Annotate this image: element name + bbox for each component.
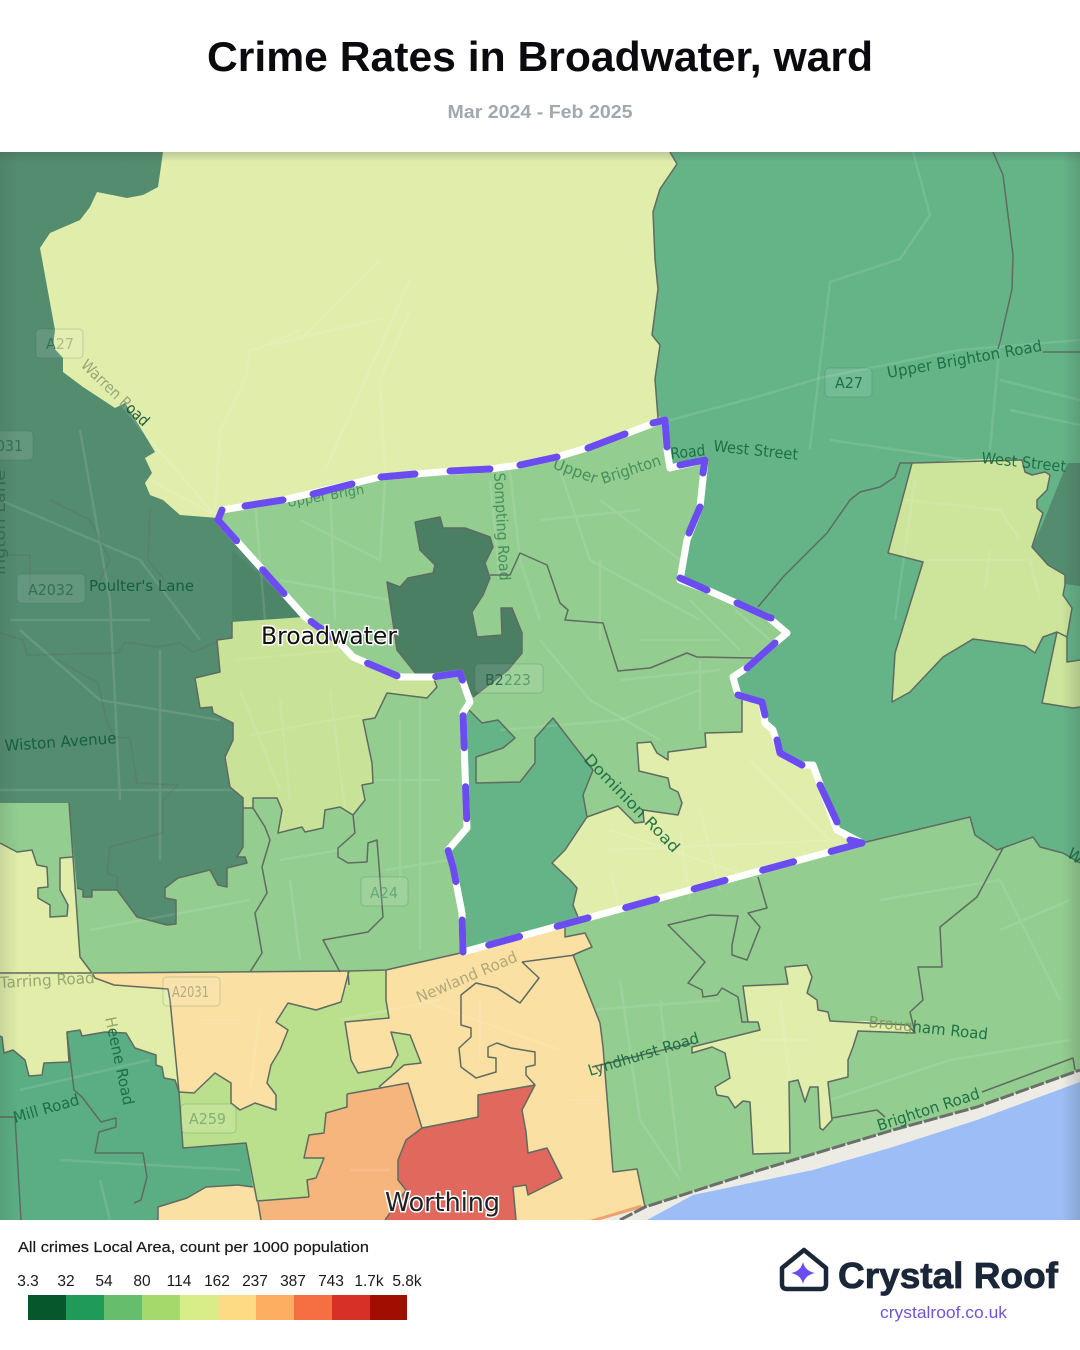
area: orange — [258, 1083, 422, 1220]
legend tick labels: 114 — [167, 1273, 192, 1290]
area: pale north-east town — [692, 965, 915, 1154]
ward and area borders — [0, 152, 1080, 1220]
road labels: Wiston Avenue — [4, 729, 117, 755]
area: light green centre — [179, 970, 421, 1201]
road labels: B2223 — [485, 671, 531, 689]
road labels: A2032 — [28, 581, 74, 599]
road labels: Brighton — [599, 452, 663, 488]
area: dark green enclave — [387, 517, 522, 697]
road labels: Warren Road — [77, 356, 153, 430]
sea and beach — [590, 1070, 1080, 1220]
place label: Broadwater: Broadwater — [261, 622, 397, 650]
dashes: bottom edge — [463, 843, 862, 952]
road labels: West Street — [981, 449, 1067, 476]
map base: light green areas — [0, 416, 1080, 1220]
dashes: north and east edges — [218, 420, 862, 843]
logo: Crystal Roof — [782, 1250, 1059, 1322]
dashes: west edge — [218, 520, 470, 952]
legend tick labels: 80 — [133, 1273, 151, 1290]
road labels: Heene Road — [101, 1015, 137, 1107]
road labels: A24 — [370, 884, 398, 902]
choropleth map — [0, 152, 1080, 1220]
legend tick labels: 32 — [57, 1273, 75, 1290]
road labels: West Street — [713, 437, 799, 464]
area: pale east island — [888, 459, 1072, 702]
legend title: All crimes Local Area, count per 1000 population — [18, 1239, 369, 1256]
road labels: Lyndhurst Road — [586, 1029, 701, 1080]
legend tick labels — [17, 1273, 422, 1290]
road labels: A2031 — [172, 983, 209, 1001]
legend tick labels: 162 — [204, 1273, 230, 1290]
area: red hotspot — [385, 1085, 562, 1220]
road labels: A27 — [835, 374, 863, 392]
area: dark green west — [0, 152, 305, 925]
area: mid green south-west — [0, 1030, 253, 1220]
legend tick labels: 387 — [280, 1273, 306, 1290]
road labels: Newland Road — [414, 948, 520, 1007]
ward boundary: white and purple dashed — [218, 420, 862, 952]
area: peach town centre — [158, 925, 645, 1220]
road labels: Upper — [551, 455, 601, 488]
road labels: Mill Road — [11, 1091, 81, 1127]
area: dark triangle beside ward — [232, 555, 300, 622]
road labels: A259 — [189, 1110, 226, 1128]
legend tick labels: 3.3 — [17, 1273, 39, 1290]
wordmark: Crystal Roof — [838, 1255, 1059, 1296]
area: pale yellow north — [40, 152, 677, 518]
legend tick labels: 1.7k — [354, 1273, 384, 1290]
area: pale south-east ward — [552, 700, 862, 917]
edge vignette — [0, 152, 1080, 1220]
road labels: Road — [670, 441, 706, 463]
area: pale centre-west — [195, 617, 437, 833]
road labels: Upper Brighton Road — [886, 337, 1043, 382]
legend tick labels: 54 — [95, 1273, 113, 1290]
road network — [0, 152, 1080, 1220]
road labels: A27 — [46, 335, 74, 353]
road shields — [0, 329, 872, 1133]
road labels: Tarring Road — [0, 969, 95, 992]
road labels: Poulter's Lane — [89, 577, 194, 595]
area: pale south-west — [0, 843, 179, 1092]
place label: Worthing: Worthing — [385, 1188, 500, 1218]
icon: house with star — [782, 1250, 826, 1289]
road labels — [0, 335, 1080, 1135]
road labels: Dominion Road — [580, 750, 683, 856]
legend tick labels: 743 — [318, 1273, 344, 1290]
area: dark corner east — [1032, 463, 1080, 586]
road labels: Upper Brigh — [286, 483, 365, 511]
subtitle: date range: Mar 2024 - Feb 2025 — [448, 101, 632, 122]
road labels: Brougham Road — [868, 1013, 989, 1044]
legend — [17, 1239, 422, 1320]
legend tick labels: 237 — [242, 1273, 268, 1290]
title: Crime Rates in Broadwater, ward — [207, 33, 873, 80]
area: mid green east — [652, 152, 1080, 863]
area: peach west of A2031 — [92, 971, 349, 1110]
area: pale sliver east — [1042, 632, 1080, 708]
legend tick labels: 5.8k — [392, 1273, 422, 1290]
legend colour bar — [28, 1295, 407, 1320]
road labels: Brighton Road — [875, 1085, 982, 1135]
website link text: crystalroof.co.uk — [880, 1304, 1008, 1322]
road labels: Sompting Road — [490, 472, 514, 581]
area: mid green south ward — [448, 708, 593, 952]
